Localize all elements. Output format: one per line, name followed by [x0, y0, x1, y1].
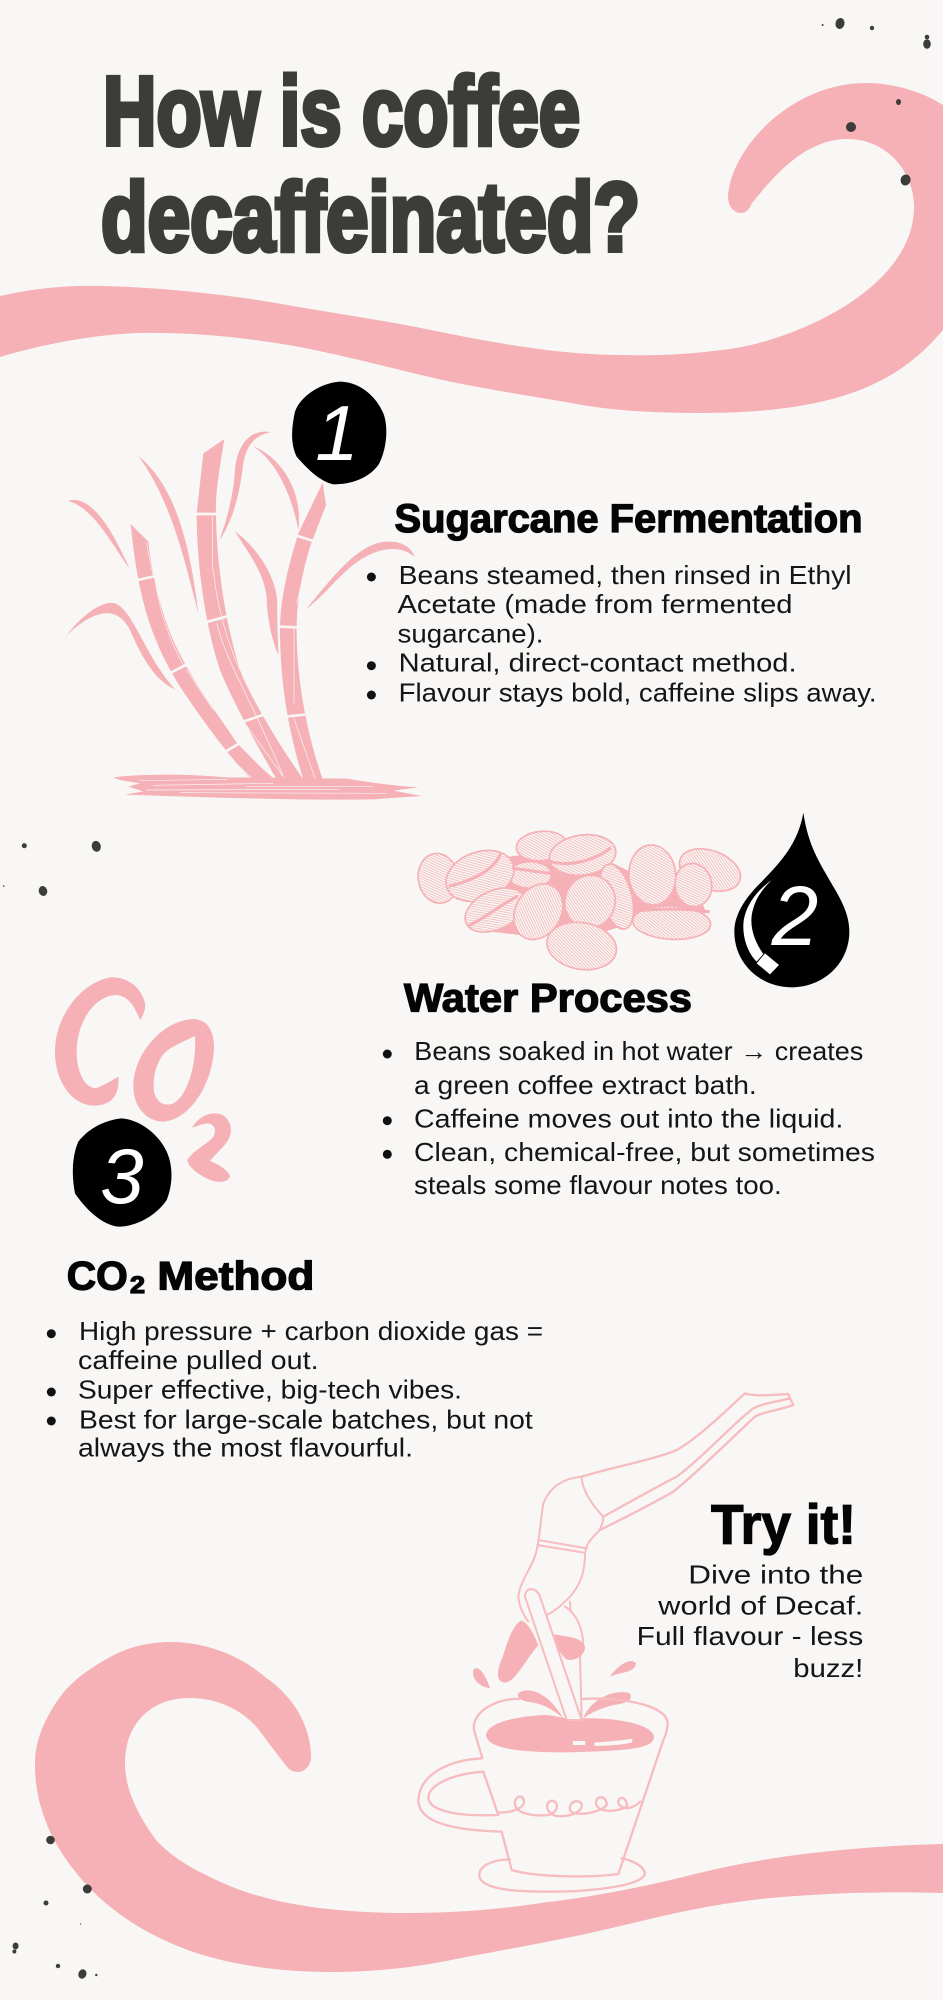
- icon: number 3 badge: [73, 1118, 171, 1227]
- bullet list: water process: Caffeine moves out into the liquid.: [414, 1103, 843, 1133]
- text: call to action: buzz!: [793, 1653, 863, 1683]
- bullet list: water process: [383, 1036, 875, 1200]
- call to action: try it: [637, 1492, 863, 1683]
- bullet list: water process: Clean, chemical-free, but sometimes: [414, 1137, 875, 1167]
- icon: number 1 badge: [292, 382, 386, 484]
- heading: sugarcane fermentation: Sugarcane Fermentation: [394, 497, 862, 541]
- icon: number 2 water drop: [734, 813, 849, 987]
- heading: CO2 method: 2: [130, 1272, 145, 1299]
- bullet list: CO2 method: [47, 1316, 543, 1463]
- icon: number 2 water drop: 2: [771, 869, 818, 963]
- ink splatter bottom left: [12, 1836, 98, 1980]
- bullet list: water process: steals some flavour notes too.: [414, 1170, 782, 1200]
- bullet list: CO2 method: Super effective, big-tech vibes.: [78, 1375, 462, 1405]
- heading: CO2 method: Method: [157, 1254, 314, 1298]
- bullet list: water process: Beans soaked in hot water → creates: [414, 1036, 863, 1066]
- section 2: water process: [383, 813, 875, 1200]
- ink splatter left middle: [3, 840, 102, 897]
- title: How is coffee: [103, 56, 580, 166]
- title: decaffeinated?: [101, 162, 640, 272]
- text: call to action: world of Decaf.: [657, 1590, 863, 1620]
- illustration: coffee beans: [414, 829, 746, 975]
- bullet list: water process: a green coffee extract bath.: [414, 1070, 757, 1100]
- bullet list: sugarcane fermentation: Acetate (made from fermented: [398, 589, 792, 619]
- section 1: sugarcane fermentation: [292, 382, 877, 707]
- bullet list: CO2 method: High pressure + carbon dioxide gas =: [79, 1316, 543, 1346]
- heading: water process: Water Process: [404, 977, 692, 1021]
- icon: number 3 badge: 3: [100, 1132, 144, 1220]
- bullet list: CO2 method: caffeine pulled out.: [78, 1345, 319, 1375]
- text: call to action: Full flavour - less: [637, 1621, 863, 1651]
- bullet list: CO2 method: Best for large-scale batches, but not: [79, 1404, 534, 1434]
- illustration: sugarcane: [66, 432, 422, 800]
- bullet list: sugarcane fermentation: Natural, direct-contact method.: [399, 648, 797, 678]
- illustration: CO2 lettering: [55, 977, 231, 1182]
- bullet list: sugarcane fermentation: Flavour stays bold, caffeine slips away.: [399, 677, 877, 707]
- bullet list: sugarcane fermentation: Beans steamed, then rinsed in Ethyl: [399, 560, 852, 590]
- icon: number 1 badge: 1: [315, 389, 359, 477]
- title: [101, 56, 640, 272]
- bullet list: sugarcane fermentation: sugarcane).: [398, 618, 544, 648]
- bullet list: sugarcane fermentation: [367, 560, 877, 707]
- text: call to action: Dive into the: [688, 1559, 863, 1589]
- bullet list: CO2 method: always the most flavourful.: [78, 1433, 413, 1463]
- ink splatter top right: [822, 17, 931, 187]
- illustration: diver plunging into coffee cup: [418, 1393, 793, 1892]
- top pink swoosh: [0, 83, 943, 413]
- bottom pink swoosh: [35, 1642, 943, 1972]
- heading: CO2 method: CO: [67, 1254, 128, 1298]
- text: call to action: [637, 1559, 863, 1683]
- heading: try it: Try it!: [711, 1492, 856, 1555]
- section 3: CO2 method: [47, 1118, 543, 1463]
